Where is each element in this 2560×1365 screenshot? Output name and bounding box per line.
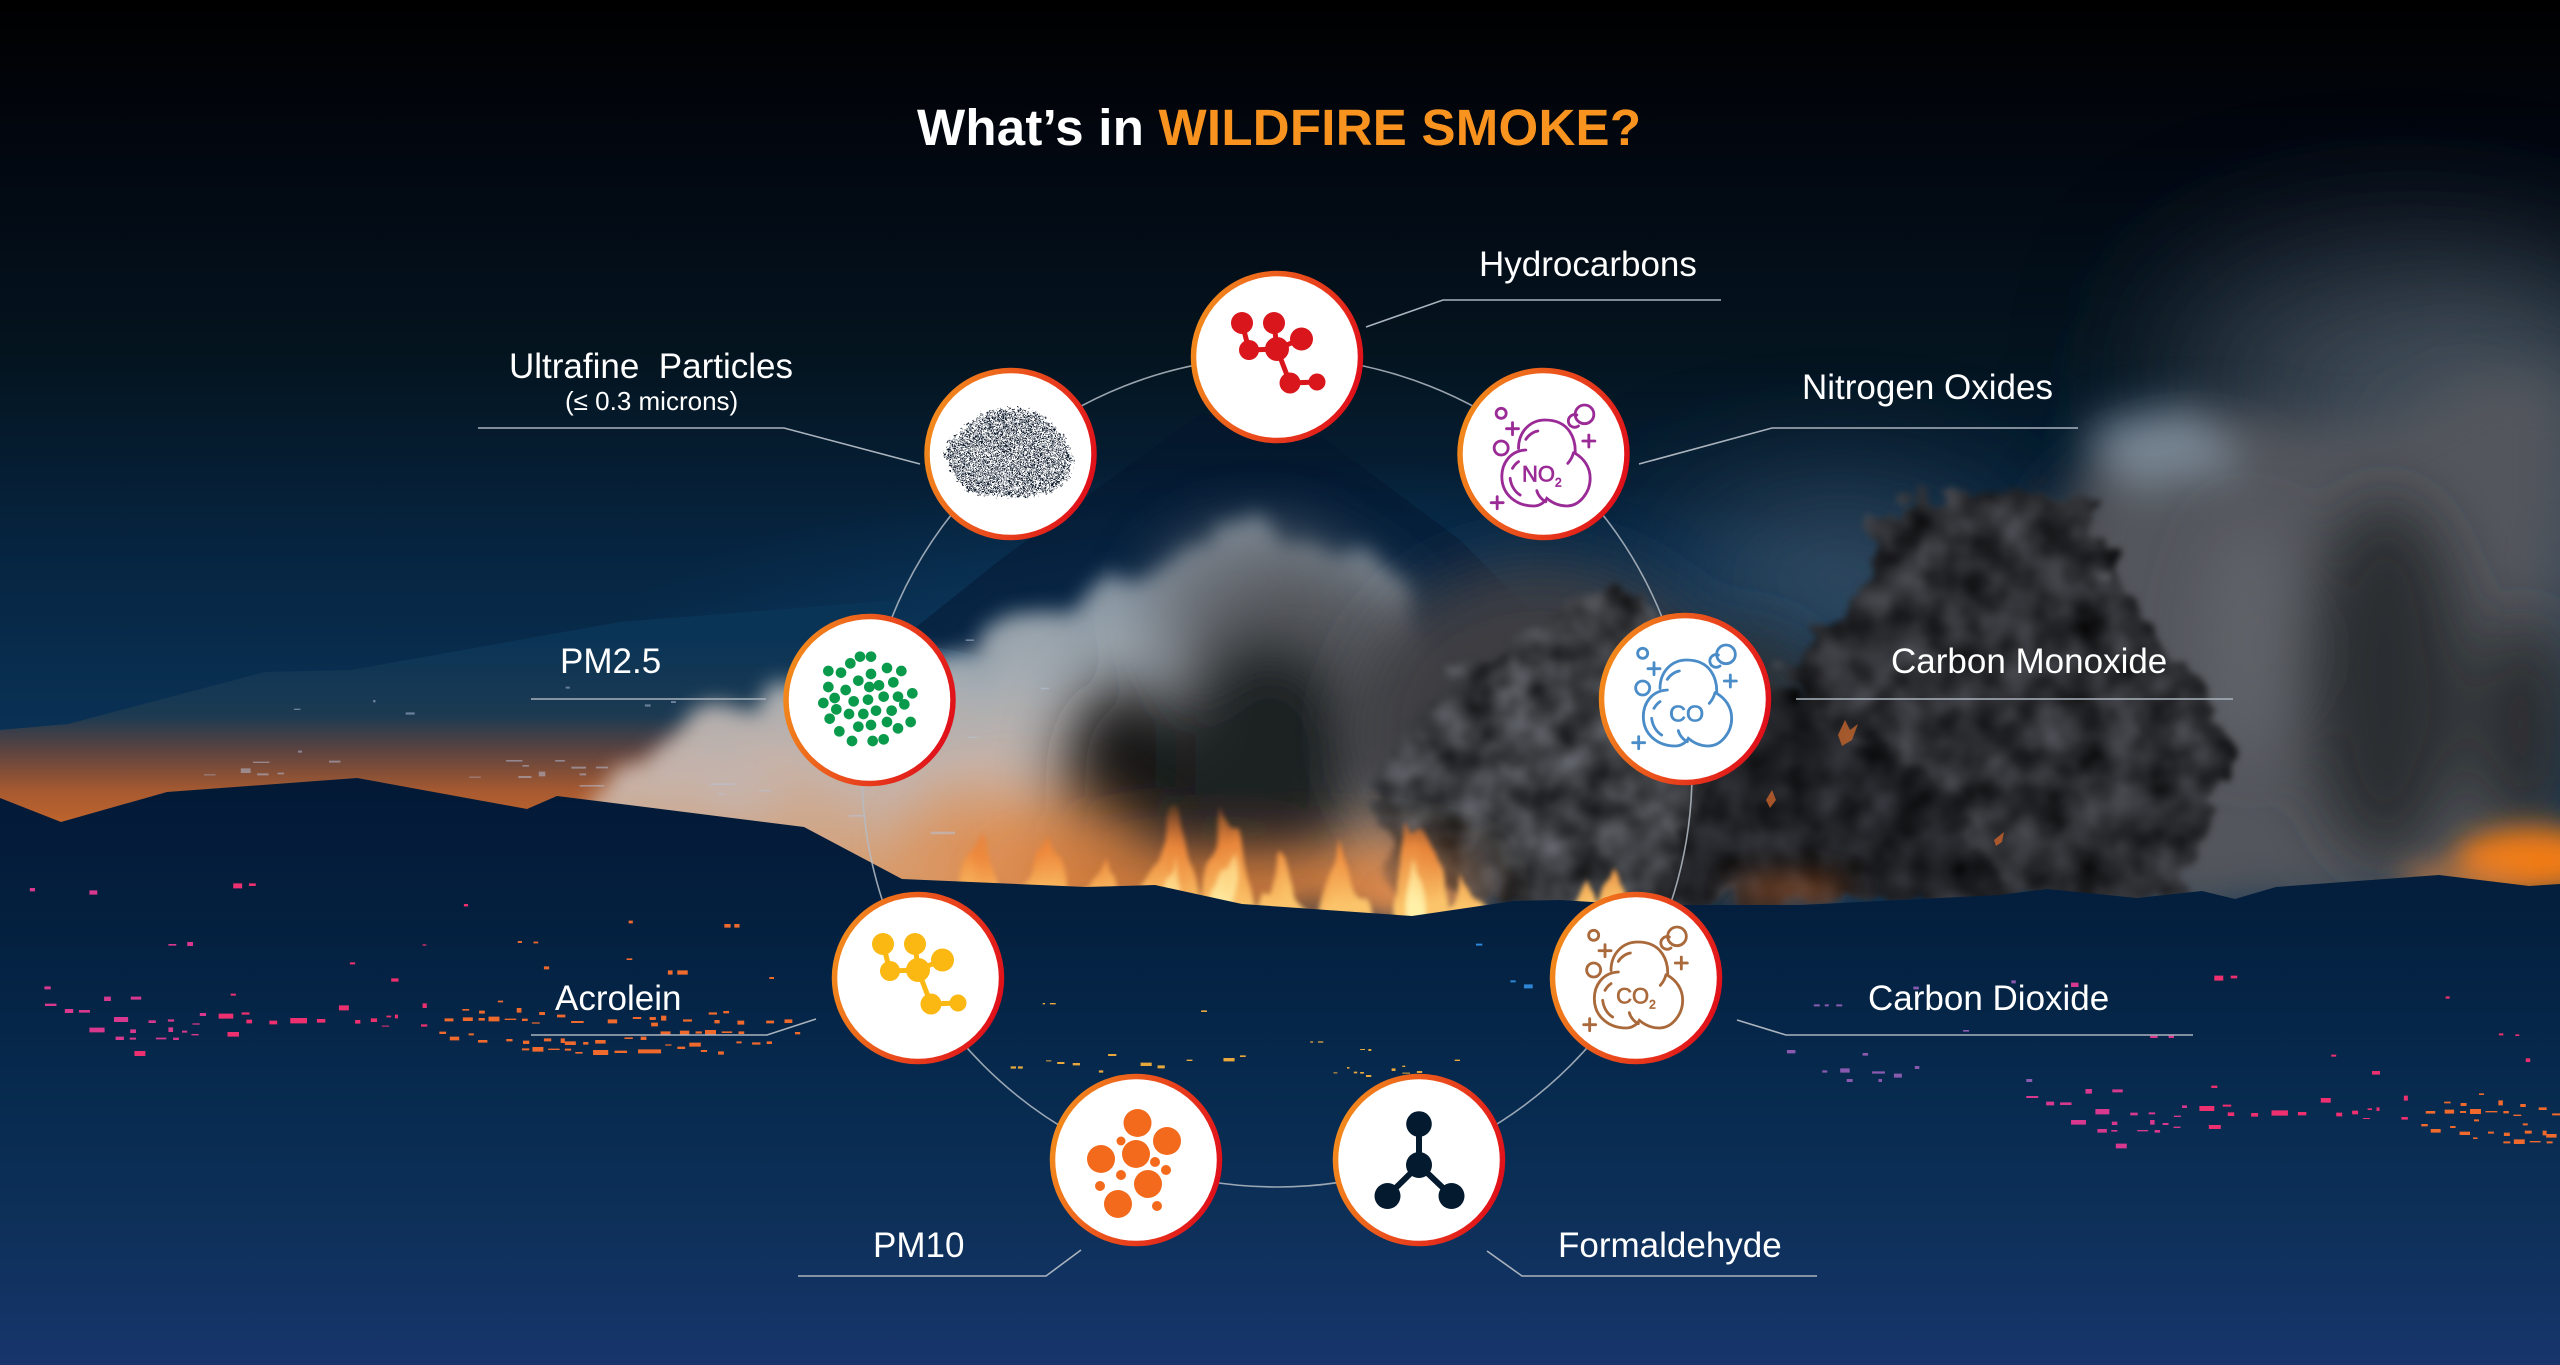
distant mountain peak [900, 413, 1560, 680]
white smoke plume on the left [560, 515, 1480, 900]
icon: nitrogen dioxide cloud [1491, 405, 1595, 509]
node: nitrogen oxides [1460, 370, 1627, 538]
node: hydrocarbons [1194, 274, 1360, 440]
distant lit hill [0, 600, 900, 900]
label: ultrafine particles [478, 347, 920, 464]
icon: carbon monoxide cloud [1633, 645, 1736, 749]
icon: hydrocarbon molecule [1231, 312, 1326, 394]
label: formaldehyde [1487, 1226, 1817, 1276]
label: nitrogen oxides: Nitrogen Oxides [1802, 368, 2053, 407]
icon: carbon monoxide cloud: CO [1669, 701, 1704, 727]
icon: nitrogen dioxide cloud: 2 [1555, 476, 1562, 490]
label: hydrocarbons: Hydrocarbons [1479, 245, 1697, 284]
label: formaldehyde: Formaldehyde [1558, 1226, 1782, 1265]
icon: carbon dioxide cloud: 2 [1649, 998, 1656, 1012]
smoke shadow columns on the right [2200, 500, 2560, 860]
node: PM10 [1052, 1076, 1220, 1244]
foreground land silhouette [0, 778, 2560, 1365]
icon: carbon dioxide cloud [1584, 927, 1687, 1031]
icon: PM2.5 particles [818, 651, 918, 746]
pale lights over the horizon [204, 639, 1049, 834]
icon: PM10 particles [1087, 1109, 1181, 1218]
scattered settlement lights, right [1787, 976, 2560, 1148]
label: carbon monoxide: Carbon Monoxide [1891, 642, 2167, 681]
label: ultrafine particles: Ultrafine Particles [509, 347, 793, 386]
icon: acrolein molecule [872, 933, 966, 1014]
label: PM2.5: PM2.5 [560, 642, 661, 681]
node: carbon monoxide [1602, 616, 1768, 782]
grey smoke column [1050, 530, 1440, 886]
middle dark smoke billow [1370, 590, 1760, 900]
scattered settlement lights, centre [1011, 944, 1533, 1077]
node: ultrafine particles [927, 370, 1094, 538]
node: carbon dioxide [1552, 894, 1720, 1062]
icon: carbon dioxide cloud: CO [1616, 983, 1649, 1008]
label: PM10: PM10 [873, 1226, 964, 1265]
label: acrolein: Acrolein [555, 979, 681, 1018]
title: What’s in WILDFIRE SMOKE? [917, 99, 1641, 156]
scattered settlement lights, left [30, 883, 800, 1056]
label: carbon dioxide: Carbon Dioxide [1868, 979, 2109, 1018]
connecting ring [862, 357, 1692, 1187]
orange glow and flames [910, 720, 2560, 935]
icon: formaldehyde molecule [1374, 1111, 1464, 1209]
high smoke haze on the right [1680, 250, 2560, 700]
label: nitrogen oxides [1639, 368, 2078, 464]
node: PM2.5 [786, 616, 953, 784]
node: acrolein [834, 894, 1002, 1062]
lower black billow [1660, 680, 2010, 900]
label: hydrocarbons [1366, 245, 1721, 327]
far right grey smoke [2060, 390, 2560, 900]
node: formaldehyde [1336, 1076, 1502, 1244]
icon: ultrafine particle cloud [942, 406, 1075, 499]
icon: nitrogen dioxide cloud: NO [1522, 461, 1555, 486]
right dark smoke billow [1700, 490, 2230, 900]
label: PM10 [798, 1226, 1081, 1276]
soft backing of the dark smoke masses [1350, 440, 2370, 910]
label: carbon dioxide [1737, 979, 2193, 1035]
label: acrolein [531, 979, 816, 1035]
label: ultrafine particles: (≤ 0.3 microns) [565, 386, 738, 416]
